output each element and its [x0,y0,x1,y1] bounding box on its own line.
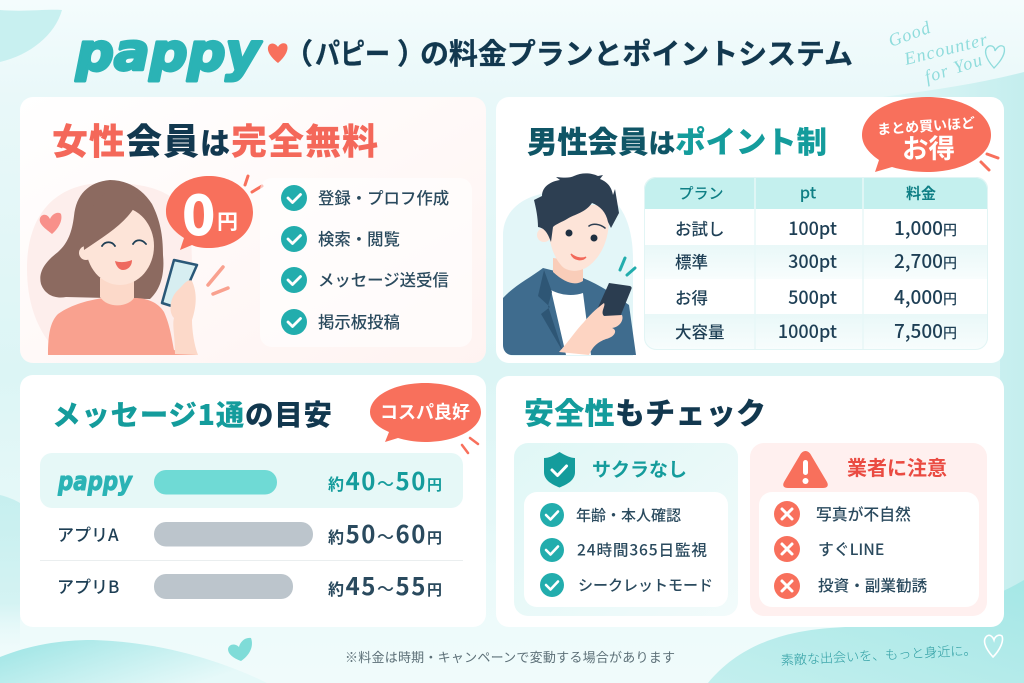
panel: safety [496,376,1004,627]
row: pappy: 約40～50円 [328,462,442,497]
row: app A: 約50～60円 [328,515,442,550]
item: secret: シークレットモード [578,574,713,596]
table rows: 300pt [788,248,837,274]
icon: teal heart [228,638,252,661]
bubble: good value: コスパ良好 [380,398,470,424]
illustration: man with phone [503,173,636,356]
table rows: 1,000円 [894,214,957,241]
bubble: bulk discount [862,97,998,172]
table rows: お得 [675,285,708,309]
row: pappy: pappy [57,467,133,497]
subpanel: no sakura: サクラなし [592,455,687,482]
panel: women free [20,97,486,363]
subpanel: scammers: 業者に注意 [847,452,947,481]
heading: safety: 安全性もチェック [524,389,766,433]
bubble: good value [370,383,481,453]
item: 掲示板 [281,309,400,335]
row: pappy [40,453,463,508]
bubble: 0 yen: 0 [182,171,216,251]
handwritten note: Good Encounter for You: Encounter [901,29,990,69]
item: 24h: 24時間365日監視 [577,538,707,560]
subpanel: no sakura [514,443,738,616]
row: app A [57,515,442,550]
item: investment: 投資・副業勧誘 [818,574,928,596]
table: plans [644,177,988,350]
handwritten tagline: 素敵な出会いを、もっと身近に。 [780,640,977,669]
list: free features [260,178,472,347]
table rows: 500pt [788,284,837,310]
row: app A: アプリA [57,521,119,546]
handwritten note: Good Encounter for You [886,17,1004,87]
illustration: smiling woman [27,180,228,355]
bubble: 0 yen: 円 [217,206,238,236]
title: の料金プランとポイントシステム [420,31,853,73]
handwritten note: Good Encounter for You: for You [922,49,986,87]
row: app B: アプリB [57,573,119,598]
item: 掲示板: 掲示板投稿 [318,309,400,333]
footnote: ※料金は時期・キャンペーンで変動する場合があります [345,647,675,666]
icon: shield [544,452,575,488]
title: パピー [315,31,390,73]
icon: warning [783,451,828,488]
item: メッセージ: メッセージ送受信 [318,267,449,291]
item: photo: 写真が不自然 [816,502,911,525]
item: 検索 [281,226,400,252]
table rows: 大容量 [675,319,724,343]
bubble: 0 yen [166,171,262,251]
title: （ [284,31,313,73]
bubble: bulk discount: お得 [902,127,955,166]
item: line: すぐLINE [818,537,884,560]
table rows: 7,500円 [894,317,957,344]
table header: プラン [678,182,724,204]
table header: pt [800,180,817,204]
item: secret [540,573,713,597]
panel: cost per message [20,375,486,627]
item: age check: 年齢・本人確認 [576,504,681,526]
item: 登録: 登録・プロフ作成 [318,185,449,209]
handwritten note: Good Encounter for You: Good [886,17,934,51]
subpanel: scammers [750,443,987,616]
panel: men points [496,97,1004,363]
item: investment [774,573,928,599]
table rows: 1000pt [778,318,837,344]
table header [678,180,936,204]
heading: women: 女性会員は完全無料 [52,113,378,165]
logo: pappy: pappy [75,23,262,83]
item: line [774,536,884,562]
table rows [675,214,957,344]
table rows: お試し [675,216,724,240]
heading: message: メッセージ1通の目安 [52,393,332,434]
item: photo [774,501,911,527]
heading: men: 男性会員はポイント制 [527,118,827,162]
title: ） [397,31,426,73]
table rows: 2,700円 [894,247,957,274]
item: 検索: 検索・閲覧 [318,226,400,250]
row: app B: 約45～55円 [328,567,442,602]
item: age check [540,503,681,527]
row: app B [57,567,442,602]
table rows: 4,000円 [894,283,957,310]
table rows: 標準 [675,249,708,273]
bubble: bulk discount: まとめ買いほど [876,113,976,139]
table rows: 100pt [788,215,837,241]
table header: 料金 [906,182,936,204]
